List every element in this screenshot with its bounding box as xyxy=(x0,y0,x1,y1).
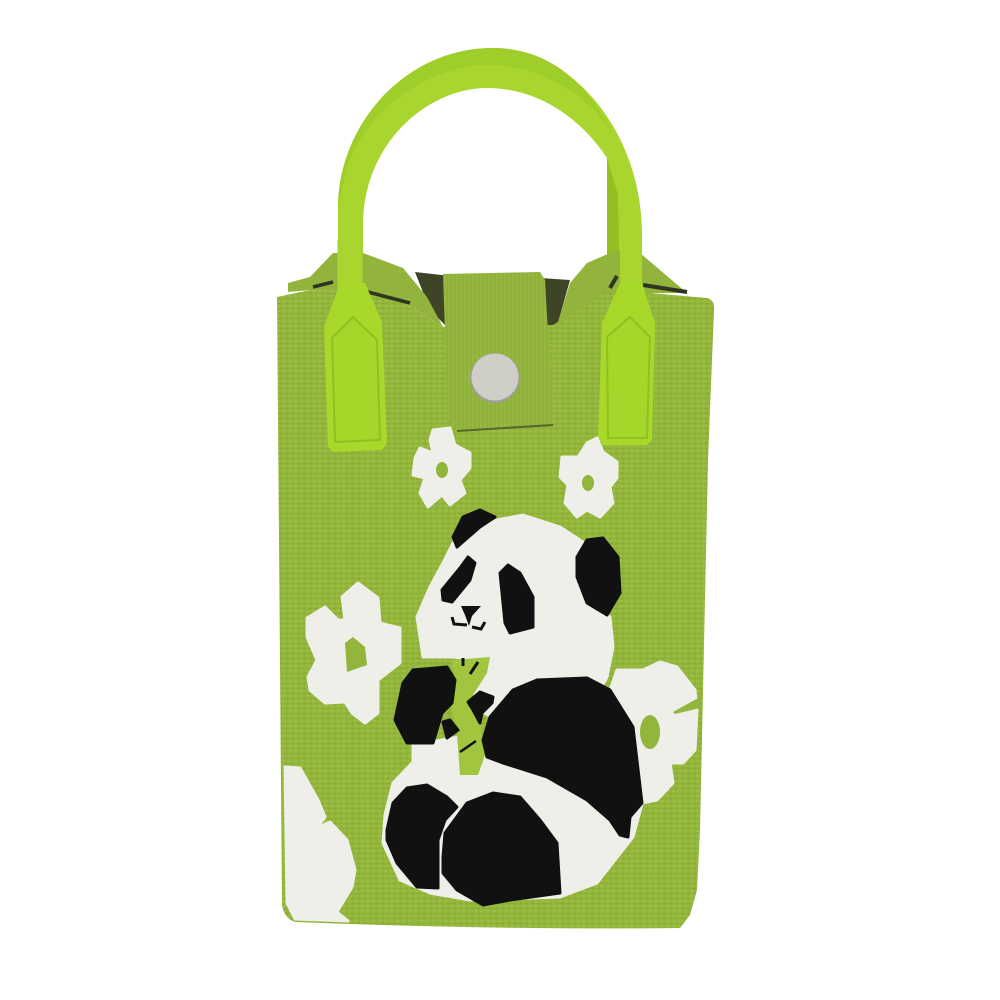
panda eye left xyxy=(442,557,475,602)
flower: top right xyxy=(560,438,617,517)
panda back xyxy=(483,678,642,837)
snap flap xyxy=(443,272,553,431)
handle end over left strap xyxy=(338,240,362,290)
panda left foot xyxy=(387,785,457,888)
panda eye right xyxy=(500,565,533,633)
panda ear left xyxy=(453,510,495,547)
left strap xyxy=(288,253,443,327)
handles xyxy=(338,48,642,290)
bamboo xyxy=(450,657,490,775)
back handle band xyxy=(338,48,613,208)
handle end over right strap xyxy=(620,240,642,290)
flower: right behind panda xyxy=(610,662,700,803)
panda ear right xyxy=(577,538,620,615)
back handle right leg xyxy=(607,158,620,290)
right handle tab xyxy=(598,283,655,445)
left handle tab xyxy=(324,283,387,452)
flower: top left xyxy=(413,428,470,507)
panda head and chest xyxy=(417,515,613,720)
flower: bottom left partial xyxy=(285,767,355,921)
right strap xyxy=(557,250,687,325)
flower: left large xyxy=(307,583,400,723)
panda xyxy=(383,510,643,905)
panda mouth xyxy=(452,617,485,629)
panda arm xyxy=(395,667,455,743)
panda nose xyxy=(461,606,481,626)
bag interior xyxy=(415,272,570,330)
bag body xyxy=(277,290,714,928)
panda arm detail xyxy=(443,720,458,738)
panda small paw xyxy=(468,692,493,723)
snap button xyxy=(470,353,520,403)
panda lower body xyxy=(383,735,643,900)
panda right leg xyxy=(443,793,560,905)
